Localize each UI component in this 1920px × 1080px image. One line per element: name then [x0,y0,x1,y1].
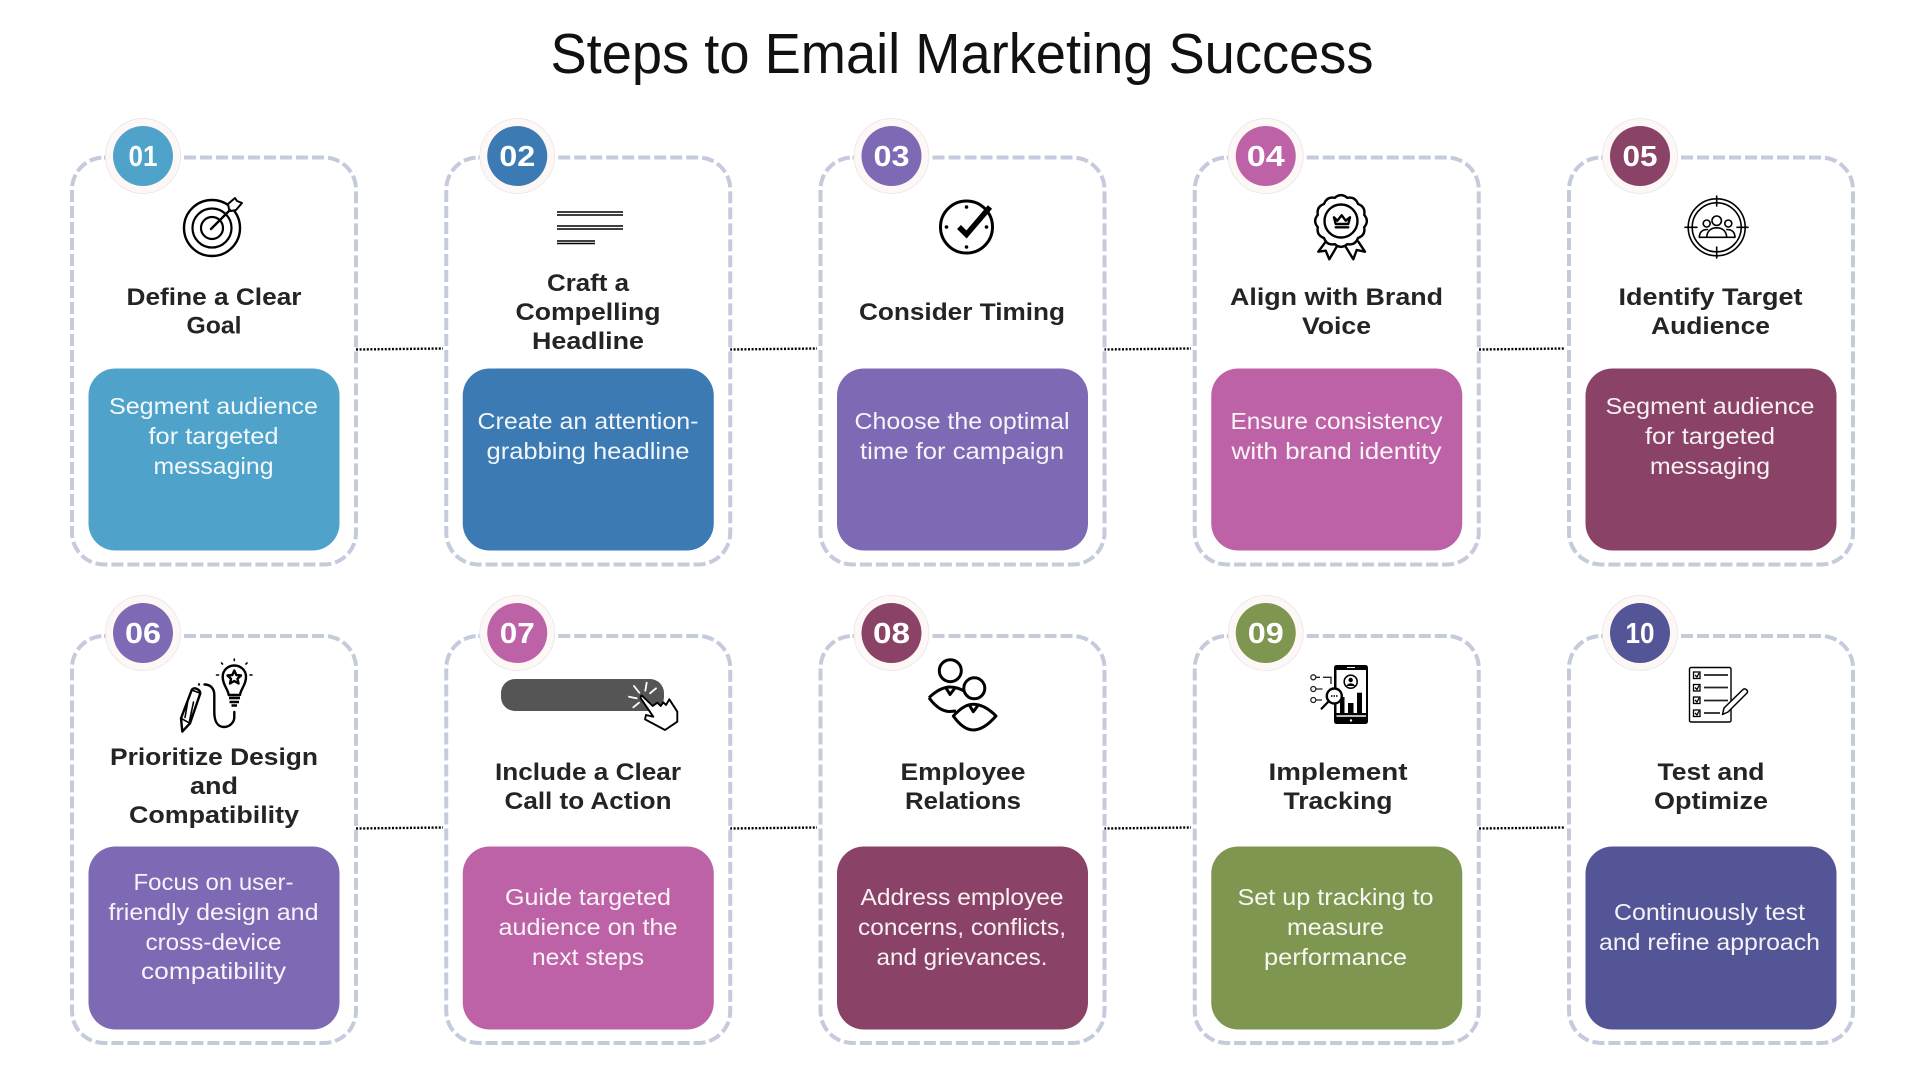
heading [495,759,681,815]
badge 10 [1602,596,1678,670]
panel: step 09 [1195,596,1479,1043]
description box [463,368,714,550]
icon: audience crosshair [1685,196,1748,258]
panel: step 03 [820,118,1104,564]
heading: Compelling [516,299,660,326]
badge 03 [854,118,929,194]
heading: Optimize [1654,788,1768,815]
heading: Include a Clear [495,759,681,786]
panel: step 06 [72,596,356,1043]
heading: and [190,773,238,800]
badge 08: 08 [873,618,910,650]
description box: friendly design and [108,899,318,925]
icon: award badge [1315,195,1367,259]
description box [463,846,714,1030]
heading [1618,284,1802,340]
description box [1211,368,1462,550]
heading: Goal [186,312,242,340]
icon: checklist and pencil [1690,668,1748,722]
heading: Craft a [547,270,629,297]
description box: Segment audience [109,393,318,419]
heading [126,284,302,340]
description box: Ensure consistency [1230,408,1443,434]
heading: Call to Action [504,788,672,815]
panel: step 05 [1569,118,1853,564]
description box: time for campaign [860,438,1064,464]
description box: next steps [532,944,644,970]
icon: clock with check [940,201,992,253]
description box: grabbing headline [486,438,690,464]
description box: audience on the [498,914,678,940]
heading: Compatibility [129,802,299,829]
badge 07 [480,596,555,670]
badge 02 [480,118,555,194]
panel: step 08 [820,596,1104,1043]
description box: Focus on user- [134,869,294,895]
description box: and grievances. [876,944,1048,970]
heading: Employee [900,759,1026,786]
badge 08 [854,596,929,670]
connectors row 1 [356,348,1565,350]
badge 05: 05 [1622,141,1658,173]
badge 09 [1228,596,1303,670]
heading [1654,759,1768,815]
heading: Voice [1302,313,1371,340]
icon: pencil and light bulb [181,659,252,732]
description box: compatibility [141,958,287,984]
description box: Guide targeted [505,884,671,910]
badge 07: 07 [500,618,535,650]
description box: messaging [154,453,274,479]
heading [110,744,318,829]
heading [900,759,1026,815]
description box: Set up tracking to [1238,884,1434,910]
badge 10: 10 [1626,618,1654,650]
description box: measure [1287,914,1384,940]
badge 02: 02 [499,141,535,173]
heading: Tracking [1284,788,1392,815]
icon: target [184,198,242,256]
heading: Audience [1651,313,1770,340]
heading [516,270,660,355]
heading [1230,284,1443,340]
badge 04: 04 [1247,141,1285,173]
description box [1586,368,1836,550]
title: Steps to Email Marketing Success [550,22,1374,86]
badge 09: 09 [1248,618,1284,650]
panel: step 02 [446,118,730,564]
description box: and refine approach [1599,929,1820,955]
badge 04 [1228,118,1303,194]
badge 03: 03 [874,141,910,173]
heading: Headline [532,328,644,355]
heading: Consider Timing [859,299,1065,326]
badge 06 [106,596,180,670]
description box: concerns, conflicts, [858,914,1066,940]
heading [1268,759,1408,815]
heading: Identify Target [1618,284,1802,311]
description box: Continuously test [1614,899,1806,925]
icon: employees [929,660,996,730]
description box: messaging [1650,453,1770,479]
panel: step 10 [1569,596,1853,1043]
description box [88,368,340,550]
panel: step 01 [72,118,356,564]
description box: Address employee [860,884,1064,910]
heading: Implement [1268,759,1408,786]
panel: step 04 [1195,118,1479,564]
panel: step 07 [446,596,730,1043]
heading: Align with Brand [1230,284,1443,311]
description box: performance [1264,944,1407,970]
description box [1586,846,1836,1030]
connectors row 2 [356,828,1565,829]
description box: cross-device [146,929,282,955]
description box: Create an attention- [478,408,698,434]
badge 06: 06 [125,618,161,650]
icon: text lines [557,212,623,244]
description box [837,368,1088,550]
heading: Define a Clear [126,284,302,311]
description box: Segment audience [1606,393,1814,419]
description box [88,846,340,1030]
badge 05 [1602,118,1678,194]
description box: for targeted [148,423,278,449]
description box [1211,846,1462,1030]
description box: Choose the optimal [854,408,1070,434]
icon: call to action button with hand [501,679,677,730]
heading: Prioritize Design [110,744,318,771]
badge 01 [106,118,180,194]
heading: Test and [1658,759,1764,786]
badge 01: 01 [128,141,158,173]
icon: phone analytics [1311,665,1368,724]
description box: with brand identity [1230,438,1442,464]
heading: Relations [905,788,1021,815]
description box: for targeted [1645,423,1775,449]
description box [837,846,1088,1030]
